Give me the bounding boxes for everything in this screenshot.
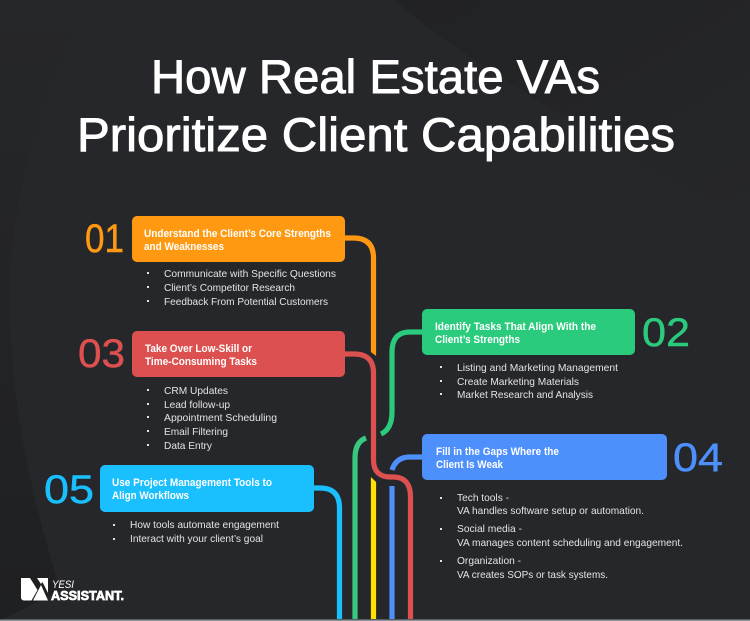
bullets 03: CRM Updates (164, 386, 228, 397)
cyan connector (314, 488, 340, 619)
title: Prioritize Client Capabilities (77, 108, 675, 161)
heading box 02 (422, 309, 635, 355)
bullets 04: Tech tools - (457, 493, 509, 504)
bullets 04: VA creates SOPs or task systems. (457, 570, 608, 581)
bullets 02 (440, 363, 618, 401)
bullets 03: Data Entry (164, 441, 213, 452)
number 03: 03 (78, 332, 125, 376)
panel 01 (85, 216, 345, 308)
heading 02: Identify Tasks That Align With the (435, 321, 596, 333)
heading box 05 (100, 465, 314, 512)
heading 04: Fill in the Gaps Where the (436, 446, 559, 458)
heading box 03 (132, 331, 345, 377)
green connector lower (355, 438, 366, 619)
heading 05: Use Project Management Tools to (112, 477, 272, 489)
bullets 02: Market Research and Analysis (457, 390, 593, 401)
bullets 04: Organization - (457, 556, 521, 567)
panel 02 (422, 309, 690, 401)
bullets 01 (147, 269, 336, 308)
heading 05 (112, 477, 272, 502)
bullets 04 (440, 493, 683, 581)
green connector upper (381, 332, 422, 434)
title: How Real Estate VAs (151, 50, 600, 103)
heading 01: and Weaknesses (144, 241, 224, 253)
orange connector (345, 235, 376, 356)
panel 05 (44, 465, 314, 545)
title (77, 50, 675, 161)
number 01: 01 (85, 217, 124, 261)
number 05: 05 (44, 468, 94, 512)
bullets 05: Interact with your client’s goal (130, 534, 263, 545)
heading 02 (435, 321, 596, 346)
number 02: 02 (642, 311, 690, 355)
bullets 03: Appointment Scheduling (164, 413, 277, 424)
heading 02: Client’s Strengths (435, 334, 520, 346)
logo text: YESI (52, 579, 74, 591)
bullets 02: Create Marketing Materials (457, 377, 579, 388)
bullets 01: Client’s Competitor Research (164, 283, 295, 294)
blue connector upper (392, 457, 422, 470)
bullets 01: Feedback From Potential Customers (164, 297, 328, 308)
number 04: 04 (673, 436, 723, 480)
panel 03 (78, 331, 345, 452)
heading 04 (436, 446, 559, 471)
heading 03: Time-Consuming Tasks (145, 356, 257, 368)
bullets 02: Listing and Marketing Management (457, 363, 618, 374)
bullets 04: VA manages content scheduling and engagement. (457, 538, 683, 549)
heading 04: Client Is Weak (436, 459, 503, 471)
logo: ASSISTANT. (51, 589, 124, 603)
yellow connector (371, 477, 376, 619)
connector lines (314, 235, 422, 619)
bullets 04: VA handles software setup or automation. (457, 506, 644, 517)
bullets 05: How tools automate engagement (130, 520, 279, 531)
icon: logo mark (21, 578, 48, 600)
blue connector lower (389, 486, 395, 619)
bullets 01: Communicate with Specific Questions (164, 269, 336, 280)
heading 05: Align Workflows (112, 490, 189, 502)
bullets 03: Lead follow-up (164, 400, 230, 411)
heading 01: Understand the Client’s Core Strengths (144, 228, 331, 240)
bullets 04: Social media - (457, 524, 522, 535)
logo (21, 578, 124, 603)
red connector (345, 354, 410, 619)
heading 03 (145, 343, 257, 368)
heading 01 (144, 228, 331, 253)
panel 04 (422, 434, 723, 581)
heading 03: Take Over Low-Skill or (145, 343, 252, 355)
heading box 04 (422, 434, 667, 480)
bullets 05 (113, 520, 279, 545)
bullets 03: Email Filtering (164, 427, 228, 438)
heading box 01 (132, 216, 345, 262)
bullets 03 (147, 386, 277, 452)
